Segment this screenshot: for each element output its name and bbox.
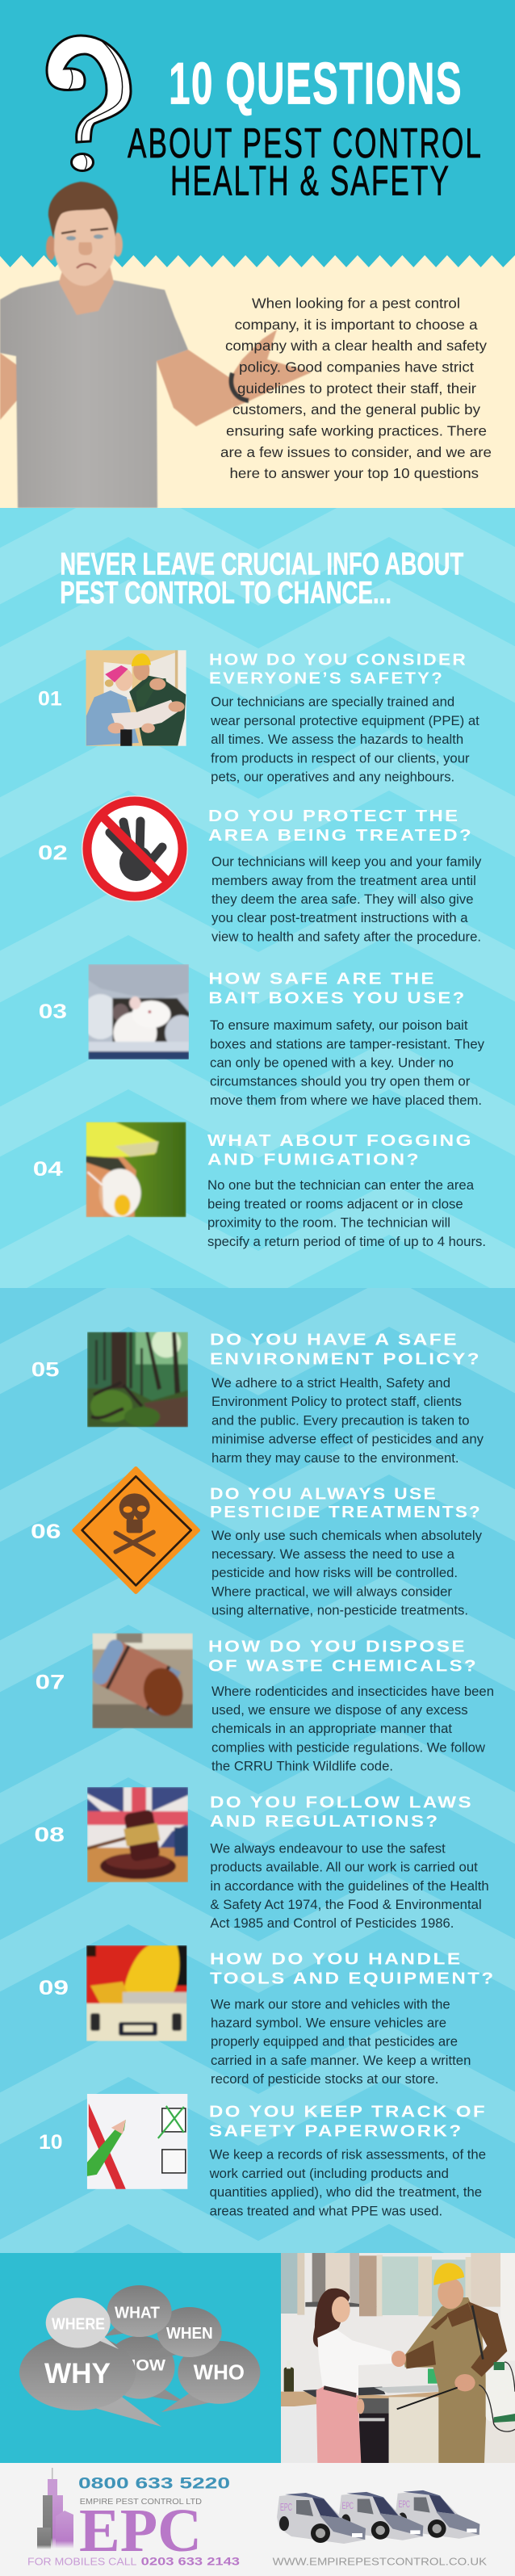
footer panel — [0, 2463, 515, 2576]
body text — [210, 695, 479, 784]
intro text: policy. Good companies have strict — [239, 359, 474, 375]
header panel background — [0, 0, 515, 275]
body text: all times. We assess the hazards to health — [211, 732, 463, 747]
panel: question 06 — [31, 1468, 483, 1618]
hair — [48, 182, 118, 238]
bubble: what — [105, 2285, 172, 2337]
body text: pesticide and how risks will be controlled. — [211, 1566, 458, 1580]
heading — [208, 970, 467, 1007]
number 06: 06 — [31, 1521, 61, 1543]
heading: PESTICIDE TREATMENTS? — [210, 1504, 482, 1521]
heading: ENVIRONMENT POLICY? — [210, 1350, 481, 1368]
body text: properly equipped and that pesticides are — [211, 2035, 458, 2049]
neck — [59, 262, 114, 315]
number 03: 03 — [39, 1001, 67, 1023]
mobile number: 0203 633 2143 — [141, 2555, 240, 2568]
panel: question 02 — [38, 795, 482, 944]
photo: gavel and union flag — [87, 1787, 188, 1882]
heading: AREA BEING TREATED? — [208, 827, 473, 845]
body text — [211, 1376, 484, 1466]
body text — [211, 1529, 483, 1618]
intro text: ensuring safe working practices. There — [226, 423, 487, 439]
shirt — [0, 280, 188, 508]
body text: specify a return period of time of up to 4 hours. — [207, 1235, 486, 1249]
panel: lower chevron section — [0, 1277, 515, 2293]
body text: chemicals in an appropriate manner that — [211, 1722, 453, 1736]
body text — [211, 1997, 471, 2087]
body text: We always endeavour to use the safest — [210, 1841, 446, 1856]
photo: shrugging man — [0, 182, 312, 508]
man's arms and hand — [0, 329, 312, 426]
heading — [210, 1951, 496, 1988]
body text: hazard symbol. We ensure vehicles are — [211, 2016, 446, 2030]
body text: view to health and safety after the procedure. — [211, 929, 481, 944]
body text: from products in respect of our clients, your — [211, 751, 470, 766]
photo: forest — [87, 1332, 188, 1428]
photo: white rat — [88, 964, 189, 1059]
body text: We adhere to a strict Health, Safety and — [211, 1376, 450, 1391]
heading: HOW DO YOU DISPOSE — [208, 1638, 467, 1655]
body text — [210, 1841, 489, 1931]
number 08: 08 — [34, 1823, 65, 1846]
heading — [209, 652, 467, 688]
heading: DO YOU ALWAYS USE — [210, 1486, 438, 1504]
heading: DO YOU FOLLOW LAWS — [210, 1794, 473, 1811]
body text: members away from the treatment area until — [211, 874, 476, 888]
body text: proximity to the room. The technician will — [207, 1216, 450, 1231]
number 09: 09 — [39, 1977, 69, 1999]
bubble: where — [46, 2298, 119, 2349]
face — [54, 205, 115, 286]
body text: areas treated and what PPE was used. — [210, 2204, 442, 2218]
van 2 — [339, 2492, 423, 2540]
mouth — [77, 264, 96, 268]
bubble: who: WHO — [194, 2360, 245, 2385]
heading: DO YOU PROTECT THE — [208, 808, 459, 825]
body text: record of pesticide stocks at our store. — [211, 2072, 438, 2087]
heading — [210, 1794, 473, 1831]
panel: question 07 — [36, 1633, 494, 1773]
website: WWW.EMPIREPESTCONTROL.CO.UK — [273, 2555, 487, 2568]
body text: carried in a safe manner. We keep a written — [211, 2054, 471, 2068]
body text: pets, our operatives and any neighbours. — [211, 770, 454, 784]
logo: building towers — [37, 2468, 73, 2549]
body text: the CRRU Think Wildlife code. — [211, 1759, 393, 1773]
body text: using alternative, non-pesticide treatments. — [211, 1604, 468, 1618]
bubble: who — [161, 2341, 260, 2412]
body text — [210, 1018, 485, 1108]
heading: WHAT ABOUT FOGGING — [207, 1132, 473, 1150]
number 01: 01 — [38, 688, 62, 711]
heading: SAFETY PAPERWORK? — [209, 2122, 463, 2140]
photo: checklist and pencils — [87, 2094, 187, 2189]
body text: boxes and stations are tamper-resistant. They — [210, 1037, 485, 1051]
body text: used, we ensure we dispose of any excess — [211, 1703, 468, 1718]
body text: Our technicians are specially trained and — [211, 695, 454, 710]
icon: no entry hand sign — [82, 795, 188, 902]
eyes — [66, 236, 76, 241]
body text: work carried out (including products and — [209, 2167, 449, 2181]
intro text: customers, and the general public by — [232, 401, 480, 417]
heading: BAIT BOXES YOU USE? — [208, 989, 467, 1007]
number 05: 05 — [31, 1358, 60, 1381]
heading: DO YOU HAVE A SAFE — [210, 1332, 458, 1349]
number 02: 02 — [38, 841, 68, 864]
heading: DO YOU KEEP TRACK OF — [209, 2103, 487, 2121]
body text: they deem the area safe. They will also give — [211, 892, 473, 907]
body text: Where practical, we will always consider — [211, 1584, 453, 1599]
panel: question 08 — [34, 1787, 489, 1931]
subheading: PEST CONTROL TO CHANCE... — [60, 576, 391, 610]
body text: Act 1985 and Control of Pesticides 1986. — [210, 1916, 454, 1931]
panel: question 10 — [39, 2094, 487, 2218]
photo: respirator mask and cap — [86, 1122, 186, 1218]
body text: move them from where we have placed them. — [210, 1093, 482, 1108]
heading — [209, 2103, 487, 2140]
body text: We keep a records of risk assessments, of the — [210, 2148, 486, 2163]
body text: circumstances should you try open them or — [210, 1075, 471, 1089]
body text: necessary. We assess the need to use a — [211, 1547, 454, 1562]
body text: quantities applied), who did the treatment, the — [210, 2185, 482, 2200]
heading — [208, 808, 473, 845]
bubble: why — [19, 2335, 161, 2427]
body text: Our technicians will keep you and your family — [211, 855, 482, 870]
body text: and the public. Every precaution is taken to — [211, 1413, 470, 1428]
body text: To ensure maximum safety, our poison bait — [210, 1018, 468, 1033]
photo: technician shaking hands in kitchen — [281, 2253, 515, 2463]
bubble: how — [105, 2336, 185, 2402]
bubble: why: WHY — [44, 2358, 111, 2389]
heading: EVERYONE’S SAFETY? — [209, 670, 444, 688]
panel: question 09 — [39, 1945, 496, 2087]
intro text: When looking for a pest control — [252, 296, 460, 312]
panel: speech bubbles — [0, 2253, 281, 2463]
body text: minimise adverse effect of pesticides and any — [211, 1433, 484, 1447]
body text: you clear post-treatment instructions with a — [211, 911, 468, 925]
body text: & Safety Act 1974, the Food & Environmental — [210, 1898, 482, 1912]
icon: question mark — [47, 36, 131, 171]
heading: HOW DO YOU HANDLE — [210, 1951, 463, 1969]
van 1 — [277, 2493, 366, 2544]
panel: question 04 — [33, 1122, 486, 1249]
body text: in accordance with the guidelines of the Health — [210, 1879, 489, 1894]
heading — [210, 1332, 481, 1368]
body text: Where rodenticides and insecticides have been — [211, 1684, 494, 1699]
nose — [78, 242, 92, 255]
intro text: guidelines to protect their staff, their — [237, 380, 476, 396]
intro text: are a few issues to consider, and we are — [220, 444, 492, 460]
subheading — [60, 547, 463, 610]
body text: We mark our store and vehicles with the — [211, 1997, 450, 2012]
heading — [210, 1486, 482, 1521]
panel: question 01 — [38, 646, 479, 784]
mobile call label: FOR MOBILES CALL — [27, 2557, 136, 2568]
body text: wear personal protective equipment (PPE) at — [210, 714, 479, 728]
number 07: 07 — [36, 1671, 65, 1693]
body text: can only be opened with a key. Under no — [210, 1056, 454, 1071]
photo: couple with plans — [86, 650, 186, 746]
logo wordmark: EPC — [79, 2497, 202, 2565]
bubble: when — [145, 2307, 222, 2360]
watch — [231, 373, 249, 401]
body text: products available. All our work is carried out — [210, 1861, 478, 1875]
intro text: here to answer your top 10 questions — [229, 465, 479, 481]
heading: HOW DO YOU CONSIDER — [209, 652, 467, 669]
photo: toolbox and hard hat — [86, 1945, 187, 2041]
intro text: company with a clear health and safety — [225, 338, 487, 354]
van 3 — [396, 2490, 479, 2539]
body text: We only use such chemicals when absolutely — [211, 1529, 483, 1543]
title — [128, 52, 483, 205]
body text — [209, 2148, 486, 2218]
heading: AND FUMIGATION? — [207, 1151, 421, 1168]
heading: TOOLS AND EQUIPMENT? — [210, 1970, 496, 1988]
body text — [207, 1178, 486, 1249]
heading: HOW SAFE ARE THE — [208, 970, 436, 988]
company name: EMPIRE PEST CONTROL LTD — [80, 2497, 202, 2507]
ears — [46, 236, 56, 260]
heading — [207, 1132, 473, 1168]
number 10: 10 — [39, 2131, 63, 2154]
bubble: what: WHAT — [115, 2304, 160, 2322]
bubble: when: WHEN — [166, 2325, 213, 2343]
heading: AND REGULATIONS? — [210, 1813, 439, 1831]
body text — [211, 855, 482, 944]
intro text — [220, 296, 492, 481]
intro text: company, it is important to choose a — [235, 317, 478, 333]
icon: hazard diamond with skull — [74, 1468, 199, 1592]
cream intro panel with zigzag edge — [0, 255, 515, 508]
bubble: how: HOW — [124, 2358, 165, 2375]
panel: upper chevron section — [0, 480, 515, 1303]
body text: No one but the technician can enter the area — [207, 1178, 474, 1193]
phone number: 0800 633 5220 — [78, 2475, 230, 2492]
heading: OF WASTE CHEMICALS? — [208, 1657, 478, 1675]
bubble: where: WHERE — [52, 2316, 105, 2334]
body text: Environment Policy to protect staff, clients — [211, 1395, 462, 1409]
heading — [208, 1638, 478, 1675]
body text: complies with pesticide regulations. We follow — [211, 1740, 485, 1755]
body text: being treated or rooms adjacent or in close — [207, 1197, 463, 1211]
number 04: 04 — [33, 1158, 63, 1181]
photo: rusty barrel — [92, 1633, 193, 1728]
panel: question 03 — [39, 964, 485, 1108]
body text: harm they may cause to the environment. — [211, 1451, 458, 1466]
body text — [211, 1684, 494, 1773]
panel: question 05 — [31, 1328, 484, 1466]
eyebrows — [61, 229, 108, 233]
